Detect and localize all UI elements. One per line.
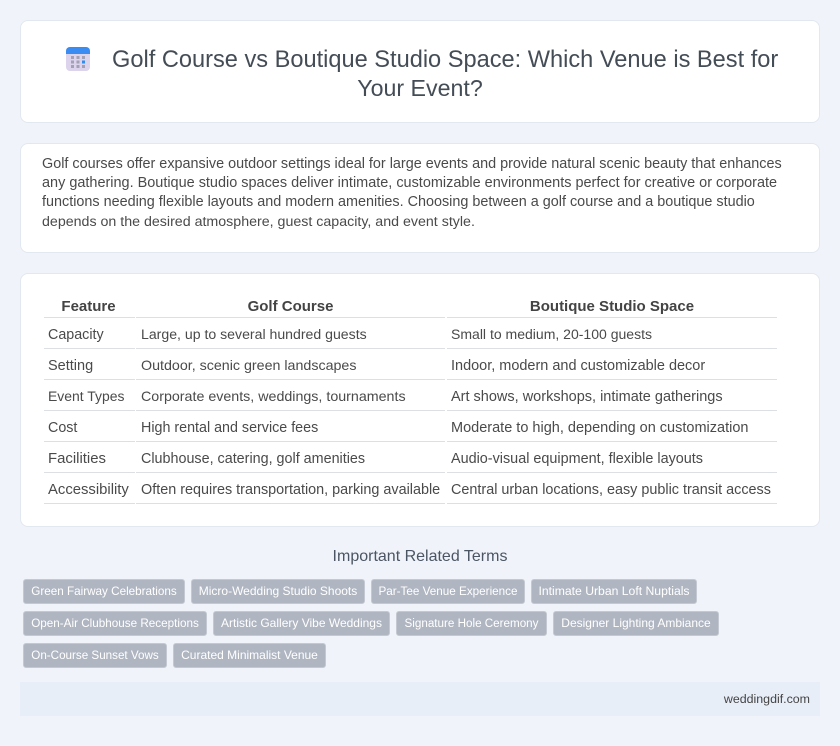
row: cost xyxy=(48,420,748,436)
footer bar xyxy=(20,682,820,716)
row: event types: Event Types xyxy=(48,388,124,404)
tag: Curated Minimalist Venue xyxy=(181,648,318,662)
panel: title card xyxy=(20,20,820,123)
tag: Artistic Gallery Vibe Weddings xyxy=(221,616,382,630)
tag: Open-Air Clubhouse Receptions xyxy=(31,617,199,630)
tag xyxy=(23,611,207,636)
row: facilities xyxy=(48,451,703,467)
panel: intro text xyxy=(20,143,820,253)
row: cost: Moderate to high, depending on customization xyxy=(451,420,748,436)
tag xyxy=(23,643,167,668)
row: facilities: Clubhouse, catering, golf amenities xyxy=(141,451,365,467)
tag: Par-Tee Venue Experience xyxy=(378,585,518,598)
row: accessibility xyxy=(48,482,771,498)
text block: intro: Golf courses offer expansive outdoor settings ideal for large events and provide natural scenic beauty that enhances xyxy=(42,156,782,172)
tag: Green Fairway Celebrations xyxy=(31,585,177,598)
tag xyxy=(553,611,719,636)
row: accessibility: Central urban locations, easy public transit access xyxy=(451,482,771,498)
row: setting: Indoor, modern and customizable decor xyxy=(451,358,705,374)
panel: comparison table xyxy=(20,273,820,527)
row: event types: Corporate events, weddings, tournaments xyxy=(141,389,406,405)
row: setting: Setting xyxy=(48,358,93,374)
tag: On-Course Sunset Vows xyxy=(31,649,159,662)
tag xyxy=(173,643,326,668)
row: capacity: Large, up to several hundred guests xyxy=(141,326,367,342)
text block: intro: any gathering. Boutique studio spaces deliver intimate, customizable environments perfect for creative or corporate xyxy=(42,175,777,191)
row: cost: High rental and service fees xyxy=(141,420,318,436)
row: facilities: Facilities xyxy=(48,451,106,467)
text block: intro: functions needing flexible layouts and modern amenities. Choosing between a golf course and a boutique studio xyxy=(42,194,755,210)
table header xyxy=(61,298,694,315)
row: setting xyxy=(48,358,705,374)
row: setting: Outdoor, scenic green landscapes xyxy=(141,358,356,374)
icon: calendar xyxy=(66,47,90,71)
row: event types xyxy=(48,388,723,405)
tag xyxy=(531,579,697,604)
row: facilities: Audio-visual equipment, flexible layouts xyxy=(451,451,703,467)
tag: Signature Hole Ceremony xyxy=(405,617,538,630)
title second line: Your Event? xyxy=(357,75,483,101)
row: capacity: Capacity xyxy=(48,327,104,343)
tag xyxy=(213,611,390,636)
table header: Golf Course xyxy=(248,298,333,315)
row: event types: Art shows, workshops, intimate gatherings xyxy=(451,389,723,405)
tag xyxy=(23,579,185,604)
footer text: weddingdif.com xyxy=(724,692,810,706)
tag: Intimate Urban Loft Nuptials xyxy=(538,584,690,598)
row: accessibility: Accessibility xyxy=(48,482,129,498)
row: cost: Cost xyxy=(48,420,77,436)
tag: Micro-Wedding Studio Shoots xyxy=(199,584,357,598)
row: accessibility: Often requires transportation, parking available xyxy=(141,482,440,498)
table header: Boutique Studio Space xyxy=(530,298,694,315)
heading: related terms: Important Related Terms xyxy=(333,548,507,565)
tag xyxy=(191,579,365,604)
table header: Feature xyxy=(61,298,116,315)
row: capacity xyxy=(48,326,652,343)
tag xyxy=(371,579,525,604)
title: Golf Course vs Boutique Studio Space: Which Venue is Best for xyxy=(112,47,778,73)
tag group xyxy=(23,579,719,668)
text block: intro: depends on the desired atmosphere, guest capacity, and event style. xyxy=(42,214,475,230)
tag xyxy=(396,611,547,636)
tag: Designer Lighting Ambiance xyxy=(561,616,711,630)
row: capacity: Small to medium, 20-100 guests xyxy=(451,326,652,342)
text block: intro xyxy=(42,156,782,230)
